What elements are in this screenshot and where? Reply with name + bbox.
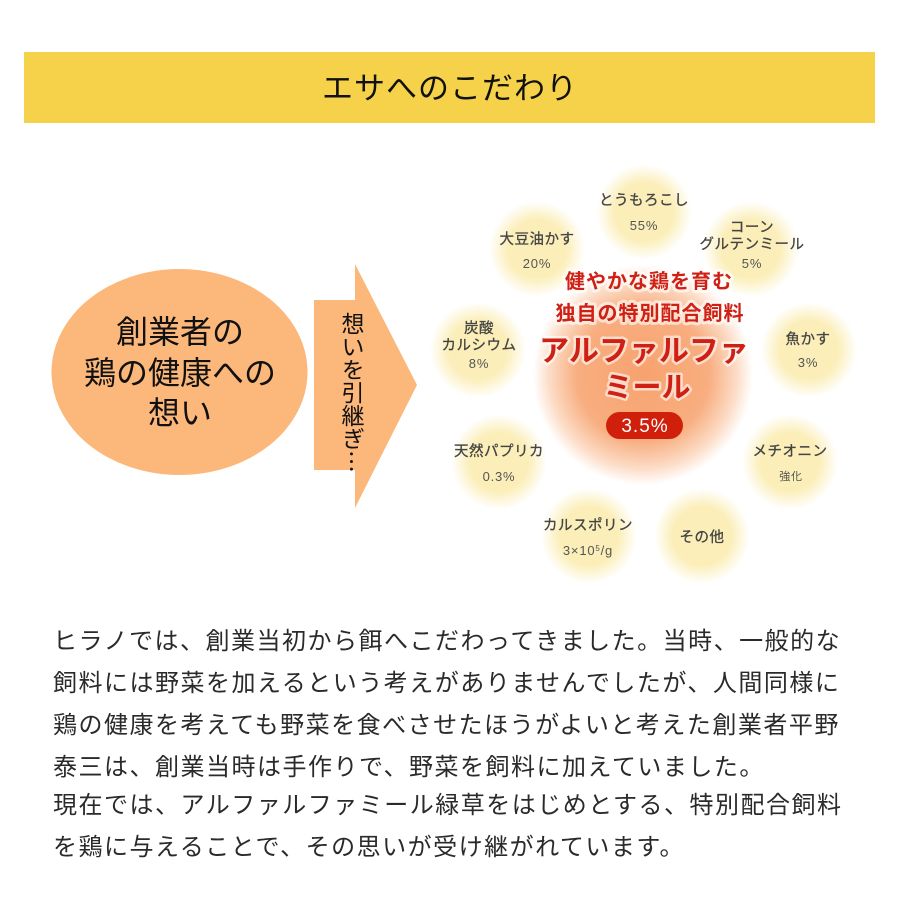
circle: alfalfa meal centre: [533, 265, 753, 485]
body text: 現在では、アルファルファミール緑草をはじめとする、特別配合飼料: [53, 792, 843, 819]
circle: methionine: メチオニン: [752, 444, 828, 460]
heading: healthy chickens: 健やかな鶏を育む: [565, 270, 733, 293]
circle: paprika: 0.3%: [483, 469, 515, 484]
circle: other: [654, 488, 750, 584]
body text: ヒラノでは、創業当初から餌へこだわってきました。当時、一般的な: [53, 628, 841, 655]
circle: carsporin: [541, 488, 637, 584]
ellipse: founder's thought: 鶏の健康への: [84, 355, 276, 391]
badge: 3.5%: 3.5%: [621, 416, 669, 437]
title banner: エサへのこだわり: [322, 71, 578, 106]
heading: special feed: 独自の特別配合飼料: [556, 302, 744, 325]
heading: meal: ミール: [603, 372, 691, 404]
title banner: [24, 52, 875, 123]
body text: 飼料には野菜を加えるという考えがありませんでしたが、人間同様に: [53, 670, 840, 697]
circle: fish meal: 3%: [798, 355, 818, 370]
circle: carsporin: カルスポリン: [543, 517, 633, 534]
circle: calcium carbonate: カルシウム: [442, 337, 516, 354]
circle: corn gluten meal: 5%: [742, 256, 762, 271]
circle: fish meal: 魚かす: [786, 331, 830, 348]
circle: corn: [596, 164, 692, 260]
circle: corn gluten meal: グルテンミール: [700, 236, 804, 253]
ellipse: founder's thought: 創業者の: [116, 314, 244, 350]
circle: carsporin: 3×10: [563, 543, 595, 558]
circle: paprika: 天然パプリカ: [454, 443, 544, 460]
circle: calcium carbonate: 8%: [469, 356, 489, 371]
circle: other: その他: [680, 529, 724, 546]
circle: corn: とうもろこし: [599, 192, 689, 209]
circle: methionine: 強化: [779, 470, 803, 483]
body text: を鶏に与えることで、その思いが受け継がれています。: [53, 834, 685, 861]
ellipse: founder's thought: 想い: [148, 395, 212, 431]
circle: corn: 55%: [630, 218, 658, 233]
circle: methionine: [742, 414, 838, 510]
circle: carsporin: 5: [595, 544, 601, 553]
circle: corn gluten meal: [700, 201, 804, 297]
arrow: carrying on the thought: [314, 264, 417, 508]
body text: [53, 628, 843, 861]
circle: carsporin: /g: [601, 543, 613, 558]
circle: calcium carbonate: 炭酸: [464, 320, 494, 337]
circle: paprika: [451, 414, 547, 510]
circle: calcium carbonate: [430, 302, 526, 398]
circle: fish meal: [761, 302, 857, 398]
circle: corn gluten meal: コーン: [730, 220, 774, 236]
arrow: carrying on the thought: 想いを引継ぎ…: [336, 312, 370, 473]
body text: 鶏の健康を考えても野菜を食べさせたほうがよいと考えた創業者平野: [53, 712, 840, 739]
badge: 3.5%: [606, 412, 683, 439]
circle: soybean meal: 20%: [523, 256, 551, 271]
circle: soybean meal: 大豆油かす: [500, 231, 574, 248]
chart: feed composition circles: [430, 164, 857, 584]
heading: alfalfa meal: アルファルファ: [539, 335, 749, 368]
body text: 泰三は、創業当時は手作りで、野菜を飼料に加えていました。: [53, 754, 765, 781]
ellipse: founder's thought: [52, 269, 308, 475]
circle: soybean meal: [489, 201, 585, 297]
